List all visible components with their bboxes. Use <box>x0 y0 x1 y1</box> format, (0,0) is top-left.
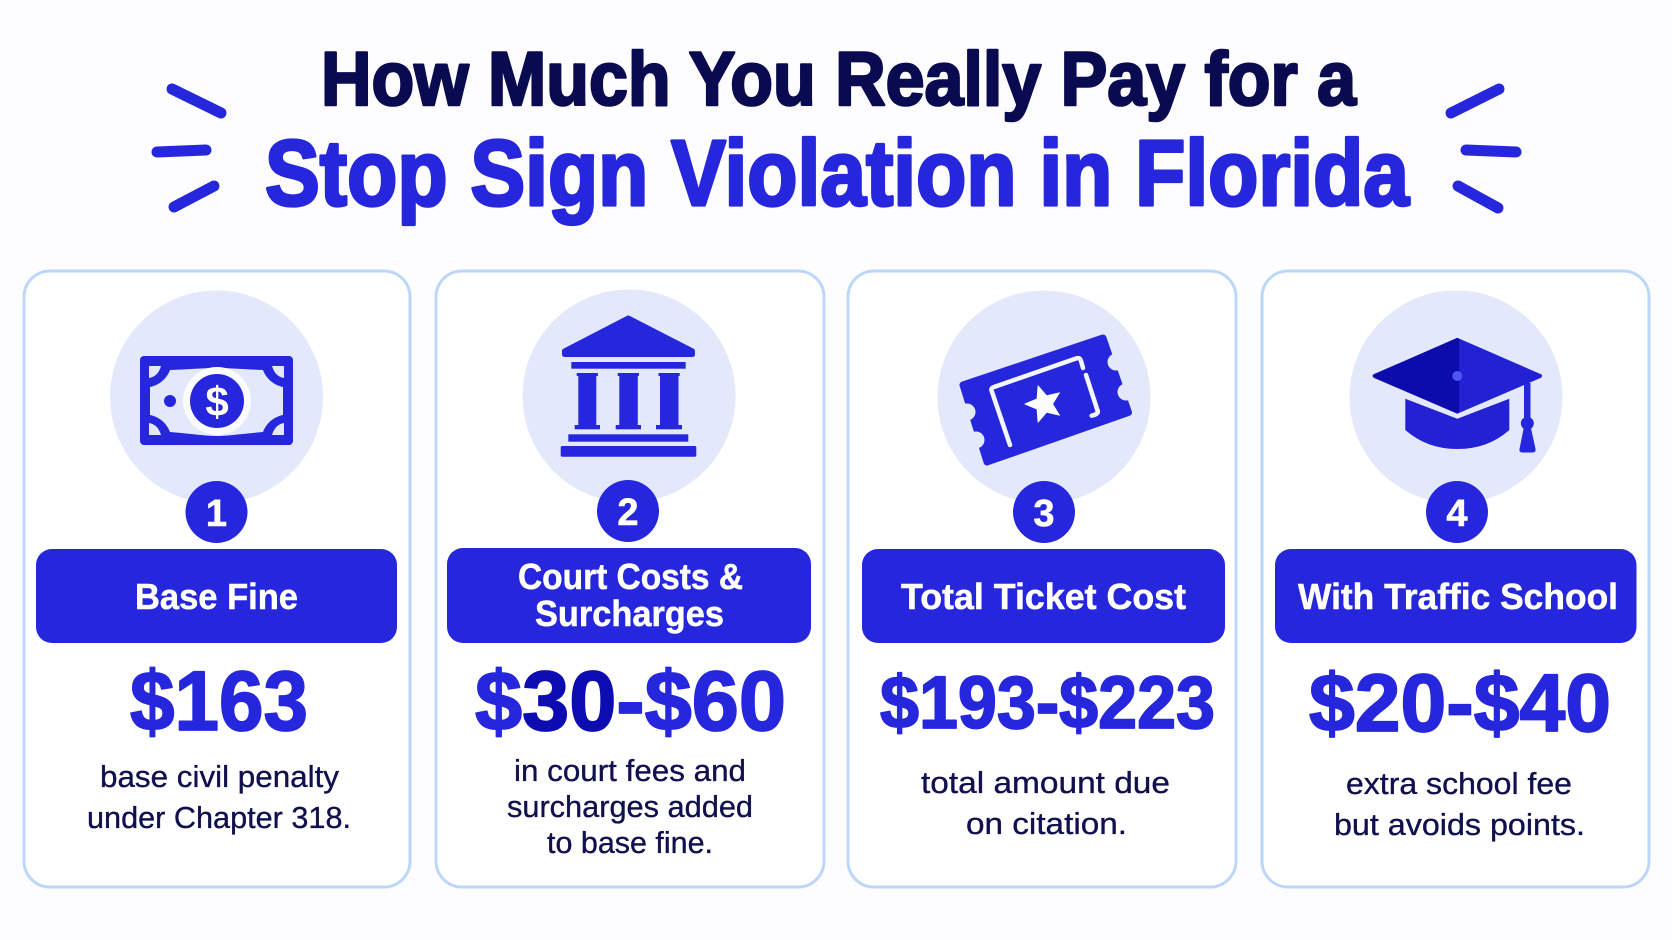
card frame <box>436 271 824 887</box>
description: surcharges added <box>507 789 753 824</box>
icon: graduation cap <box>1375 340 1540 452</box>
description: on citation. <box>966 806 1127 841</box>
number badge 4 <box>1426 481 1488 543</box>
number badge 2 <box>597 480 659 542</box>
heading banner: total ticket cost <box>862 549 1225 643</box>
number badge 2: 2 <box>617 492 639 534</box>
icon: courthouse <box>561 318 696 457</box>
heading banner: court costs and surcharges <box>447 548 811 643</box>
panel: with traffic school <box>1262 271 1649 887</box>
card frame <box>24 271 410 887</box>
number badge 1 <box>186 481 248 543</box>
icon: left emphasis ticks <box>157 89 221 207</box>
card frame <box>848 271 1236 887</box>
card frame <box>1262 271 1649 887</box>
description <box>1334 766 1585 842</box>
heading banner: court costs and surcharges: Surcharges <box>535 593 724 634</box>
description <box>87 759 351 835</box>
description: extra school fee <box>1346 766 1572 801</box>
description: in court fees and <box>514 753 746 788</box>
description <box>921 765 1170 841</box>
number badge 1: 1 <box>206 493 227 535</box>
value: $193-$223: $193-$223 <box>880 661 1215 744</box>
number badge 4: 4 <box>1446 493 1468 535</box>
icon background circle <box>522 290 736 502</box>
panel: total ticket cost <box>848 271 1236 887</box>
icon background circle <box>110 290 323 504</box>
description: under Chapter 318. <box>87 800 351 835</box>
description: base civil penalty <box>100 759 340 794</box>
icon: ticket <box>958 338 1134 462</box>
number badge 3: 3 <box>1033 493 1055 535</box>
number badge 3 <box>1013 481 1075 543</box>
description: to base fine. <box>547 825 713 860</box>
heading banner: with traffic school <box>1275 549 1636 643</box>
icon: dollar bill: $ <box>205 378 229 425</box>
heading banner: base fine <box>36 549 397 643</box>
icon: dollar bill <box>140 356 293 445</box>
panel: court costs and surcharges <box>436 271 824 887</box>
value: $30-$60: $30-$60 <box>475 654 786 748</box>
icon background circle <box>1350 290 1562 504</box>
panel: base fine <box>24 271 410 887</box>
title <box>265 37 1410 225</box>
description <box>507 753 753 860</box>
description: but avoids points. <box>1334 807 1585 842</box>
value: $20-$40: $20-$40 <box>1309 658 1611 749</box>
value: $163: $163 <box>130 654 308 748</box>
icon: right emphasis ticks <box>1451 89 1516 208</box>
heading banner: court costs and surcharges: Court Costs & <box>518 556 743 597</box>
title line 2: Stop Sign Violation in Florida <box>265 121 1410 225</box>
heading banner: total ticket cost: Total Ticket Cost <box>901 576 1186 617</box>
heading banner: with traffic school: With Traffic School <box>1298 576 1618 617</box>
heading banner: base fine: Base Fine <box>135 576 298 617</box>
title line 1: How Much You Really Pay for a <box>321 37 1357 122</box>
description: total amount due <box>921 765 1170 800</box>
icon background circle <box>938 290 1150 504</box>
